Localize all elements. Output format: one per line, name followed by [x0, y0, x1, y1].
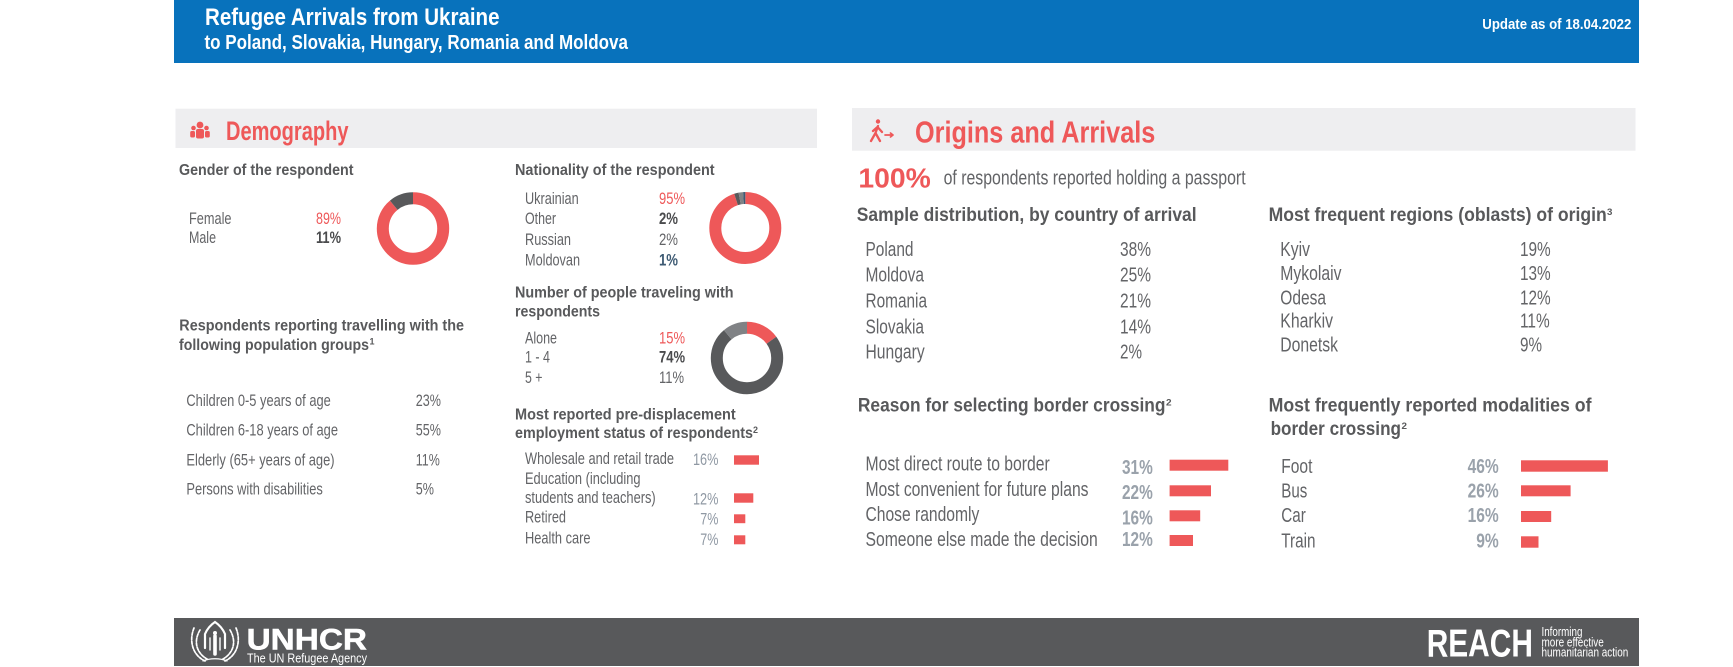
reason row most convenient: 22%: [1122, 482, 1153, 504]
row odesa: Odesa: [1280, 286, 1326, 309]
traveling row 1-4: 74%: [659, 348, 685, 367]
modality row bus: 26%: [1468, 480, 1499, 502]
nationality row other: 2%: [659, 209, 678, 228]
traveling row alone: Alone: [525, 328, 557, 348]
panel: population groups: [179, 318, 464, 498]
REACH wordmark: REACH: [1427, 623, 1533, 666]
reason row most convenient: Most convenient for future plans: [866, 478, 1088, 501]
modality row train: 9%: [1476, 531, 1499, 553]
nationality row russian: Russian: [525, 230, 571, 249]
employment heading: employment status of respondents: [515, 425, 753, 442]
panel: pre-displacement employment status: [515, 406, 759, 549]
UNHCR tagline: The UN Refugee Agency: [247, 652, 368, 666]
row odesa: [1280, 286, 1551, 309]
row moldova: 25%: [1120, 263, 1151, 286]
reason row someone else: 12%: [1122, 529, 1153, 551]
gender row female: 89%: [316, 209, 341, 228]
gender row male: 11%: [316, 228, 341, 247]
employment row education: students and teachers): [525, 488, 656, 507]
employment row health care: [525, 528, 745, 549]
row poland: Poland: [866, 238, 914, 261]
row kyiv: [1280, 238, 1551, 261]
modality row car: [1281, 504, 1551, 527]
modality row foot: Foot: [1281, 455, 1313, 478]
employment row health care: Health care: [525, 528, 590, 547]
nationality row ukrainian: 95%: [659, 189, 685, 208]
modality row bus: [1281, 479, 1571, 502]
row donetsk: [1280, 334, 1542, 357]
regions heading: Most frequent regions (oblasts) of origin: [1269, 204, 1607, 226]
population groups heading: following population groups: [179, 337, 369, 354]
nationality row russian: 2%: [659, 230, 678, 249]
row slovakia: [866, 315, 1151, 338]
gender row male: [189, 228, 341, 247]
modalities heading: [1269, 395, 1592, 440]
row moldova: [866, 263, 1151, 286]
row poland: [866, 238, 1151, 261]
population groups heading: 1: [370, 336, 374, 346]
reason row chose randomly: 16%: [1122, 507, 1153, 529]
row kharkiv: 11%: [1520, 309, 1550, 332]
traveling row 1-4: 1 - 4: [525, 348, 550, 367]
nationality row russian: [525, 230, 678, 249]
row kyiv: Kyiv: [1280, 238, 1311, 261]
callout: passport statistic: 100%: [858, 163, 931, 194]
nationality row other: Other: [525, 209, 556, 228]
modality row train: [1281, 530, 1538, 553]
row slovakia: 14%: [1120, 315, 1151, 338]
modality row foot: [1281, 455, 1608, 478]
employment row health care: 7%: [700, 530, 718, 549]
row mykolaiv: 13%: [1520, 262, 1551, 285]
gender row female: Female: [189, 209, 232, 228]
row kharkiv: Kharkiv: [1280, 309, 1334, 332]
gender row female: [189, 209, 341, 228]
nationality heading: Nationality of the respondent: [515, 162, 715, 179]
REACH tagline: more effective: [1542, 636, 1604, 650]
REACH tagline: humanitarian action: [1542, 646, 1628, 660]
row kharkiv: [1280, 309, 1550, 332]
gender heading: Gender of the respondent: [179, 162, 354, 179]
traveling heading: [515, 284, 734, 321]
panel: gender of the respondent: [179, 162, 443, 259]
row romania: Romania: [866, 289, 927, 312]
gender row male: Male: [189, 228, 216, 247]
employment heading: [515, 406, 758, 442]
modality row bus: Bus: [1281, 479, 1307, 502]
population groups heading: Respondents reporting travelling with the: [179, 318, 464, 335]
panel: most frequent regions of origin: [1269, 204, 1612, 357]
population groups heading: [179, 318, 464, 354]
modality row train: Train: [1281, 530, 1316, 553]
panel: modalities of border crossing: [1269, 395, 1608, 553]
traveling row 5+: 5 +: [525, 368, 542, 387]
header banner: [174, 0, 1639, 63]
population row children 6-18: Children 6-18 years of age: [186, 420, 338, 439]
population row elderly: 11%: [416, 450, 440, 469]
panel: nationality of the respondent: [515, 162, 775, 270]
employment row education: 12%: [693, 490, 718, 509]
nationality row ukrainian: [525, 189, 685, 208]
reason row most direct: 31%: [1122, 457, 1153, 479]
traveling row 5+: [525, 368, 684, 387]
modalities heading: 2: [1402, 421, 1407, 431]
employment heading: Most reported pre-displacement: [515, 406, 736, 423]
row moldova: Moldova: [866, 263, 924, 286]
reason row most direct: [866, 453, 1228, 479]
nationality row moldovan: 1%: [659, 251, 678, 270]
REACH tagline: [1542, 625, 1628, 660]
row slovakia: Slovakia: [866, 315, 924, 338]
nationality row moldovan: Moldovan: [525, 251, 580, 270]
callout: passport statistic: of respondents reported holding a passport: [944, 166, 1246, 189]
modalities heading: Most frequently reported modalities of: [1269, 395, 1592, 417]
modalities heading: border crossing: [1271, 418, 1401, 440]
employment row retired: [525, 508, 745, 528]
title: Refugee Arrivals from Ukraine: [205, 4, 500, 31]
population row children 0-5: Children 0-5 years of age: [186, 391, 331, 410]
population row children 0-5: 23%: [416, 391, 441, 410]
reason heading: 2: [1166, 398, 1172, 408]
demography heading: Demography: [226, 116, 349, 146]
nationality donut chart: [715, 198, 775, 258]
employment row retired: Retired: [525, 508, 566, 527]
traveling row alone: 15%: [659, 328, 685, 348]
panel: sample distribution by country of arrival: [857, 204, 1197, 364]
row donetsk: 9%: [1520, 334, 1542, 357]
population row elderly: Elderly (65+ years of age): [186, 450, 335, 469]
nationality row other: [525, 209, 678, 228]
panel: number of people traveling with respondents: [515, 284, 777, 388]
REACH tagline: Informing: [1542, 625, 1582, 639]
employment row wholesale: Wholesale and retail trade: [525, 449, 674, 468]
employment row education: Education (including: [525, 469, 640, 488]
reason heading: Reason for selecting border crossing: [858, 395, 1166, 417]
traveling heading: Number of people traveling with: [515, 284, 734, 301]
icon: group of people: [190, 122, 210, 138]
update date: Update as of 18.04.2022: [1482, 16, 1631, 33]
traveling row alone: [525, 328, 685, 348]
traveling row 5+: 11%: [659, 368, 684, 387]
row kyiv: 19%: [1520, 238, 1551, 261]
UNHCR wordmark: UNHCR: [247, 623, 367, 656]
row romania: [866, 289, 1151, 312]
regions heading: 3: [1607, 207, 1612, 217]
row poland: 38%: [1120, 238, 1151, 261]
reason row someone else: Someone else made the decision: [866, 528, 1098, 551]
panel: demography heading band: [176, 109, 817, 148]
modality row car: 16%: [1468, 505, 1499, 527]
row romania: 21%: [1120, 289, 1151, 312]
population row disabilities: 5%: [416, 479, 434, 498]
row hungary: 2%: [1120, 341, 1142, 364]
origins heading: Origins and Arrivals: [915, 115, 1155, 150]
employment row wholesale: 16%: [693, 450, 718, 469]
row donetsk: Donetsk: [1280, 334, 1339, 357]
row mykolaiv: Mykolaiv: [1280, 262, 1342, 285]
population row children 6-18: 55%: [416, 420, 441, 439]
population row disabilities: Persons with disabilities: [186, 479, 323, 498]
panel: reason for selecting border crossing: [858, 395, 1228, 551]
footer banner: [174, 618, 1639, 666]
reason row chose randomly: Chose randomly: [866, 503, 980, 526]
sample distribution heading: Sample distribution, by country of arrival: [857, 204, 1197, 226]
employment row retired: 7%: [700, 509, 718, 528]
nationality row moldovan: [525, 251, 678, 270]
row mykolaiv: [1280, 262, 1551, 285]
reason row chose randomly: [866, 503, 1200, 529]
panel: origins and arrivals heading band: [852, 108, 1636, 151]
reason row most direct: Most direct route to border: [866, 453, 1050, 476]
traveling heading: respondents: [515, 304, 600, 321]
row hungary: Hungary: [866, 341, 925, 364]
modality row foot: 46%: [1468, 456, 1499, 478]
icon: UNHCR emblem: [192, 622, 238, 661]
subtitle: to Poland, Slovakia, Hungary, Romania and Moldova: [204, 32, 629, 54]
employment row education: [525, 469, 753, 509]
row odesa: 12%: [1520, 286, 1551, 309]
row hungary: [866, 341, 1142, 364]
nationality row ukrainian: Ukrainian: [525, 189, 579, 208]
icon: walking person with arrow: [871, 119, 893, 141]
gender donut chart: [383, 198, 443, 259]
traveling donut chart: [717, 328, 777, 388]
modality row car: Car: [1281, 504, 1306, 527]
employment heading: 2: [753, 425, 758, 435]
traveling row 1-4: [525, 348, 685, 367]
callout: passport statistic: [858, 163, 1246, 194]
